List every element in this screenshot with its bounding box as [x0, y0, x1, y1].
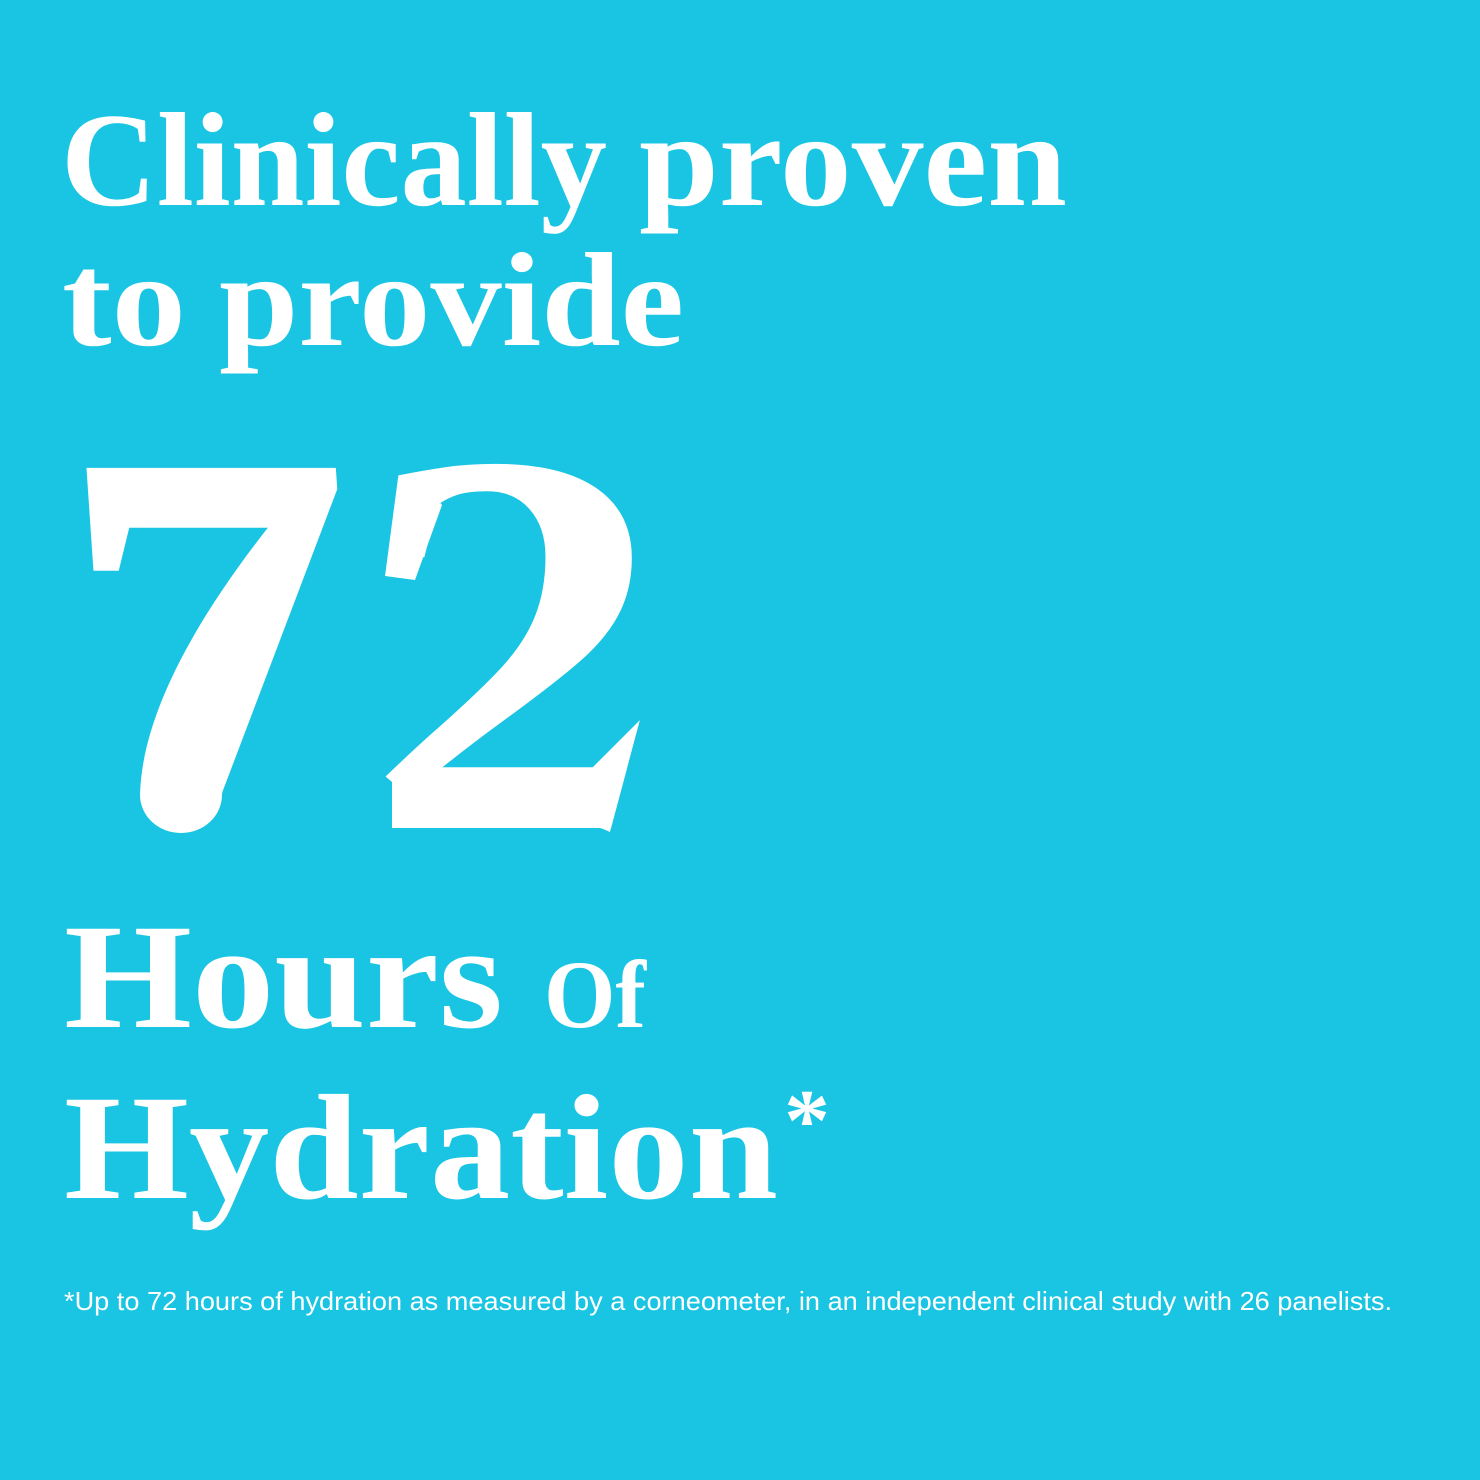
- heading: hydration with asterisk: Hydration: [64, 1065, 778, 1231]
- heading: intro line 1: proven: [639, 86, 1067, 234]
- heading: hours of: [64, 894, 647, 1060]
- big number: 72: 2: [359, 338, 666, 947]
- heading: hours of: Of: [544, 941, 647, 1048]
- heading: hydration with asterisk: *: [784, 1073, 830, 1170]
- big number: 72: [44, 338, 666, 948]
- heading: intro line 2: to: [62, 226, 186, 374]
- heading: intro line 1: Clinically: [61, 86, 607, 234]
- heading: intro line 1: [61, 86, 1067, 234]
- footnote: *Up to 72 hours of hydration as measured by a corneometer, in an independent clinical study with 26 panelists.: [64, 1286, 1392, 1316]
- heading: intro line 2: provide: [219, 226, 684, 374]
- heading: hours of: Hours: [64, 894, 503, 1060]
- big number: 72: 7: [44, 339, 383, 948]
